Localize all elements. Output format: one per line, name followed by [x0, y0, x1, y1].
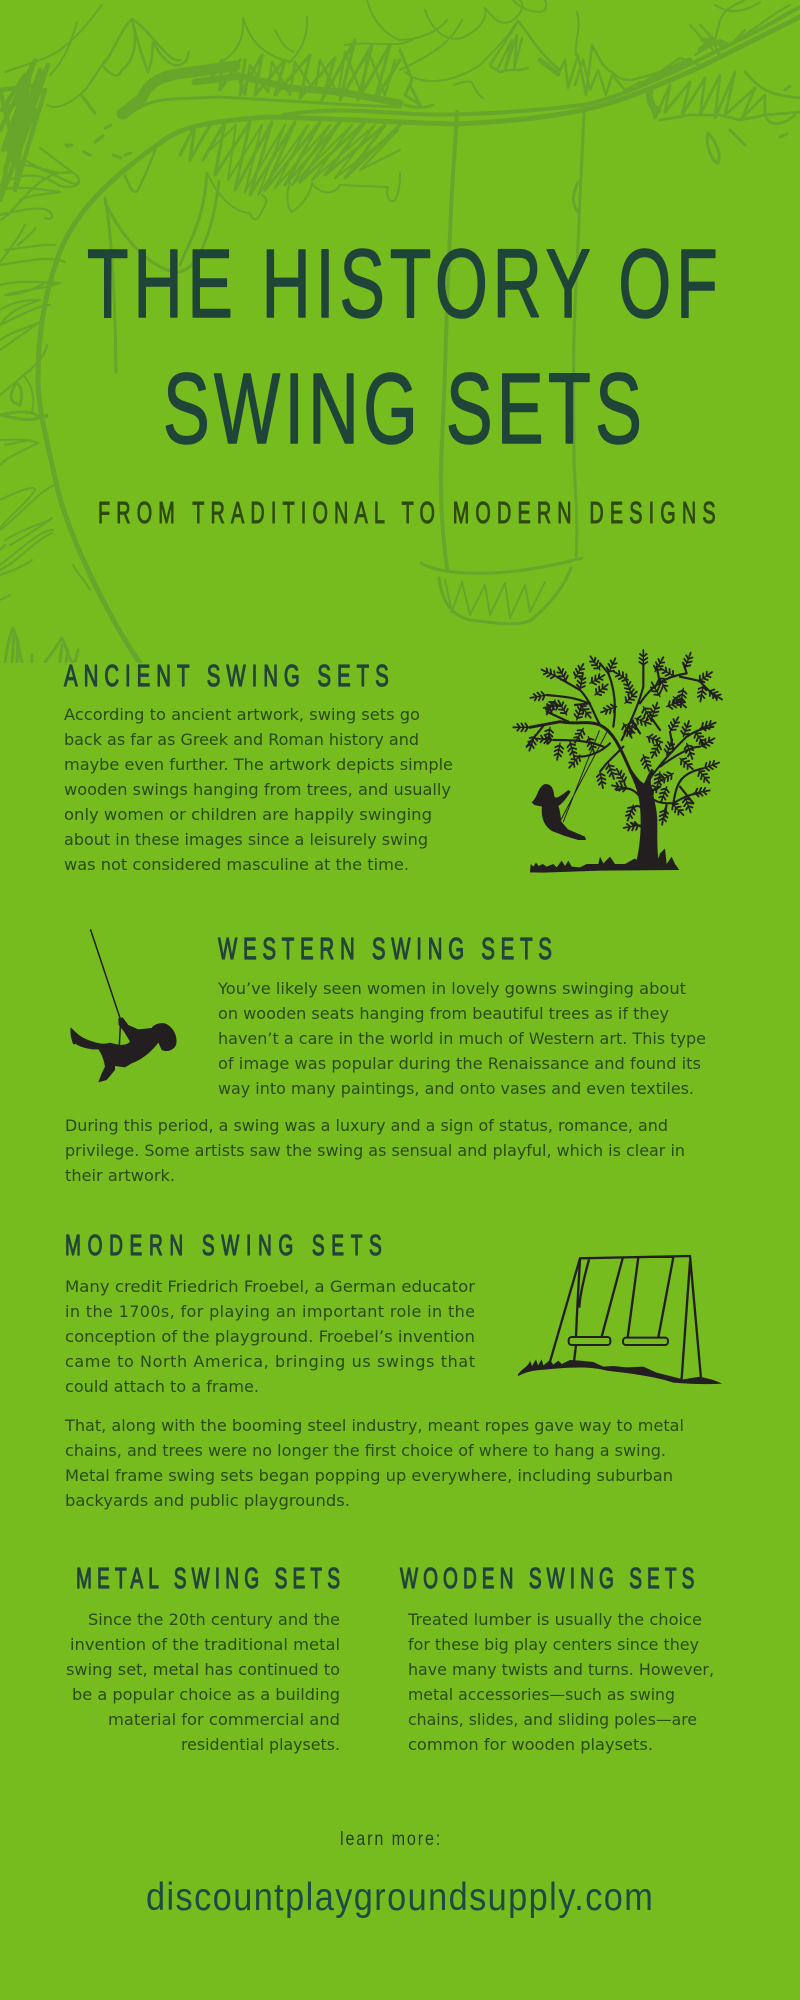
text block: ancient: wooden swings hanging from trees, and usually: [64, 780, 451, 799]
title: [87, 229, 718, 465]
text block: modern: Many credit Friedrich Froebel, a German educator: [65, 1277, 475, 1296]
text block: western: [65, 979, 706, 1185]
heading: western swing sets: WESTERN SWING SETS: [218, 931, 552, 966]
text block: wooden: for these big play centers since they: [408, 1635, 699, 1654]
heading: ancient swing sets: ANCIENT SWING SETS: [64, 658, 389, 693]
call to action: learn more: learn more:: [340, 1828, 440, 1849]
panel: ancient swing sets: [64, 650, 724, 874]
text block: ancient: maybe even further. The artwork depicts simple: [64, 755, 453, 774]
text block: western: During this period, a swing was a luxury and a sign of status, romance, and: [65, 1116, 668, 1135]
text block: metal: be a popular choice as a building: [72, 1685, 340, 1704]
text block: ancient: [64, 705, 453, 874]
title: THE HISTORY OF: [87, 229, 718, 338]
text block: ancient: about in these images since a leisurely swing: [64, 830, 428, 849]
text block: wooden: [407, 1610, 714, 1754]
panel: wooden swing sets: [400, 1563, 714, 1754]
icon: silhouette on rope swing: [70, 930, 177, 1082]
text block: wooden: metal accessories—such as swing: [408, 1685, 675, 1704]
text block: western: of image was popular during the Renaissance and found its: [218, 1054, 701, 1073]
text block: modern: That, along with the booming steel industry, meant ropes gave way to metal: [64, 1416, 684, 1435]
text block: modern: backyards and public playgrounds.: [65, 1491, 350, 1510]
heading: modern swing sets: MODERN SWING SETS: [65, 1230, 382, 1262]
panel: western swing sets: [65, 930, 706, 1185]
icon: girl swinging from tree: [513, 650, 724, 873]
text block: ancient: was not considered masculine at the time.: [64, 855, 409, 874]
text block: metal: residential playsets.: [181, 1735, 340, 1754]
text block: metal: material for commercial and: [108, 1710, 340, 1729]
text block: wooden: have many twists and turns. However,: [408, 1660, 714, 1679]
background illustration: hand-drawn tree swing: [0, 0, 800, 663]
text block: western: on wooden seats hanging from beautiful trees as if they: [218, 1004, 669, 1023]
text block: metal: swing set, metal has continued to: [66, 1660, 340, 1679]
panel: metal swing sets: [66, 1563, 340, 1754]
text block: metal: Since the 20th century and the: [88, 1610, 340, 1629]
text block: metal: [66, 1610, 340, 1754]
text block: ancient: back as far as Greek and Roman history and: [64, 730, 419, 749]
text block: modern: chains, and trees were no longer the first choice of where to hang a swing.: [65, 1441, 666, 1460]
text block: modern: [64, 1277, 684, 1510]
text block: modern: in the 1700s, for playing an important role in the: [65, 1302, 475, 1321]
website url: discountplaygroundsupply.com: [146, 1875, 653, 1918]
text block: wooden: chains, slides, and sliding poles—are: [408, 1710, 697, 1729]
subtitle: FROM TRADITIONAL TO MODERN DESIGNS: [98, 494, 716, 530]
text block: western: privilege. Some artists saw the swing as sensual and playful, which is clear in: [65, 1141, 685, 1160]
icon: swing set outline: [518, 1256, 722, 1384]
text block: modern: came to North America, bringing us swings that: [65, 1352, 475, 1371]
title: SWING SETS: [163, 354, 642, 465]
text block: modern: could attach to a frame.: [65, 1377, 259, 1396]
panel: modern swing sets: [64, 1230, 722, 1510]
text block: modern: conception of the playground. Froebel’s invention: [65, 1327, 475, 1346]
text block: wooden: common for wooden playsets.: [408, 1735, 653, 1754]
text block: western: haven’t a care in the world in much of Western art. This type: [218, 1029, 706, 1048]
heading: metal swing sets: METAL SWING SETS: [76, 1563, 340, 1595]
text block: ancient: only women or children are happily swinging: [64, 805, 432, 824]
text block: wooden: Treated lumber is usually the choice: [407, 1610, 702, 1629]
heading: wooden swing sets: WOODEN SWING SETS: [400, 1563, 694, 1595]
text block: western: You’ve likely seen women in lovely gowns swinging about: [217, 979, 686, 998]
text block: ancient: According to ancient artwork, swing sets go: [64, 705, 420, 724]
text block: modern: Metal frame swing sets began popping up everywhere, including suburban: [65, 1466, 673, 1485]
text block: western: way into many paintings, and onto vases and even textiles.: [218, 1079, 694, 1098]
text block: western: their artwork.: [65, 1166, 175, 1185]
text block: metal: invention of the traditional metal: [70, 1635, 340, 1654]
